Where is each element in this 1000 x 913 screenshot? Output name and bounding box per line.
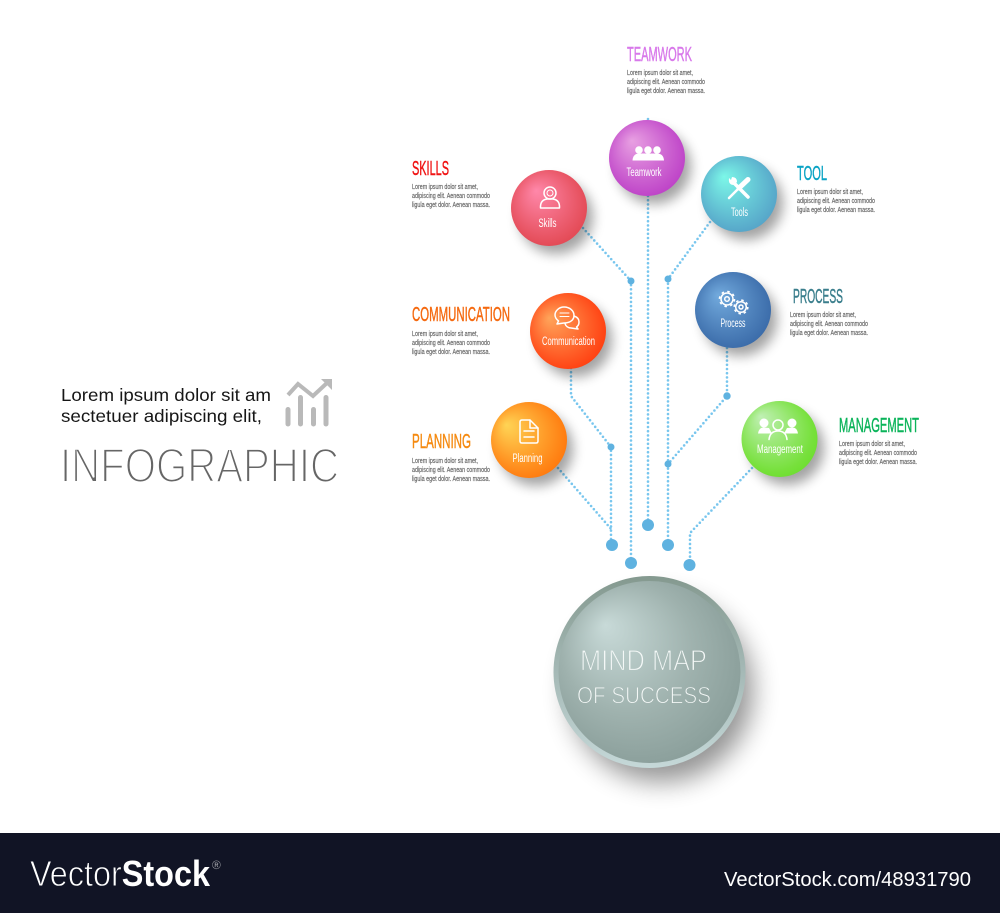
node: process bbox=[695, 272, 777, 356]
icon: people bbox=[758, 418, 798, 440]
body text: tool bbox=[797, 187, 875, 214]
body text: teamwork: adipiscing elit. Aenean commodo bbox=[627, 77, 705, 86]
icon: gears bbox=[720, 292, 748, 314]
node: management: Management bbox=[757, 444, 804, 456]
body text: management: adipiscing elit. Aenean commodo bbox=[839, 448, 917, 457]
panel: process bbox=[695, 272, 868, 356]
central circle: mind map of success bbox=[554, 576, 753, 782]
node: teamwork: Teamwork bbox=[626, 167, 662, 179]
panel: teamwork bbox=[609, 44, 705, 204]
node: management bbox=[742, 401, 824, 485]
heading: communication: COMMUNICATION bbox=[412, 304, 510, 326]
body text: teamwork bbox=[627, 68, 705, 95]
node: tool: Tools bbox=[731, 207, 748, 219]
connector lines bbox=[558, 119, 752, 571]
body text: communication: Lorem ipsum dolor sit amet, bbox=[412, 329, 478, 338]
body text: tool: adipiscing elit. Aenean commodo bbox=[797, 196, 875, 205]
footer logo: VectorStock bbox=[30, 853, 211, 894]
body text: skills: Lorem ipsum dolor sit amet, bbox=[412, 182, 478, 191]
body text: tool: Lorem ipsum dolor sit amet, bbox=[797, 187, 863, 196]
panel: tool bbox=[701, 156, 875, 240]
body text: management bbox=[839, 439, 917, 466]
body text: communication: ligula eget dolor. Aenean massa. bbox=[412, 347, 490, 356]
body text: planning: Lorem ipsum dolor sit amet, bbox=[412, 456, 478, 465]
body text: skills: adipiscing elit. Aenean commodo bbox=[412, 191, 490, 200]
body text: process: ligula eget dolor. Aenean massa. bbox=[790, 328, 868, 337]
central title bbox=[577, 644, 711, 710]
body text: planning bbox=[412, 456, 490, 483]
body text: teamwork: Lorem ipsum dolor sit amet, bbox=[627, 68, 693, 77]
node: communication bbox=[530, 293, 612, 377]
node: teamwork bbox=[609, 120, 691, 204]
icon: person bbox=[540, 187, 560, 208]
body text: communication: adipiscing elit. Aenean commodo bbox=[412, 338, 490, 347]
body text: process bbox=[790, 310, 868, 337]
icon: wrench and screwdriver bbox=[729, 177, 748, 198]
heading: teamwork: TEAMWORK bbox=[627, 44, 692, 66]
footer id: VectorStock.com/48931790 bbox=[724, 869, 971, 891]
heading: skills: SKILLS bbox=[412, 158, 449, 180]
icon: team bbox=[632, 146, 664, 160]
body text: planning: ligula eget dolor. Aenean massa. bbox=[412, 474, 490, 483]
body text: tool: ligula eget dolor. Aenean massa. bbox=[797, 205, 875, 214]
body text: skills bbox=[412, 182, 490, 209]
body text: process: Lorem ipsum dolor sit amet, bbox=[790, 310, 856, 319]
central title: OF SUCCESS bbox=[577, 682, 711, 710]
node: process: Process bbox=[720, 318, 746, 330]
body text: planning: adipiscing elit. Aenean commodo bbox=[412, 465, 490, 474]
node: communication: Communication bbox=[542, 336, 595, 348]
node: skills bbox=[511, 170, 593, 254]
body text: process: adipiscing elit. Aenean commodo bbox=[790, 319, 868, 328]
body text: skills: ligula eget dolor. Aenean massa. bbox=[412, 200, 490, 209]
heading: process: PROCESS bbox=[793, 286, 843, 308]
icon: growth chart bbox=[286, 379, 332, 426]
registered mark: ® bbox=[212, 858, 221, 872]
intro text: sectetuer adipiscing elit, bbox=[61, 406, 262, 426]
panel: communication bbox=[412, 293, 612, 377]
node: planning bbox=[491, 402, 573, 486]
left heading block bbox=[60, 379, 339, 493]
heading: planning: PLANNING bbox=[412, 431, 471, 453]
body text: communication bbox=[412, 329, 490, 356]
panel: skills bbox=[412, 158, 593, 254]
node: planning: Planning bbox=[512, 453, 542, 465]
heading: tool: TOOL bbox=[797, 163, 827, 185]
intro text: Lorem ipsum dolor sit am bbox=[61, 385, 271, 405]
infographic title: INFOGRAPHIC bbox=[60, 440, 339, 493]
panel: planning bbox=[412, 402, 573, 486]
icon: document bbox=[520, 420, 538, 443]
body text: management: Lorem ipsum dolor sit amet, bbox=[839, 439, 905, 448]
heading: management: MANAGEMENT bbox=[839, 415, 919, 437]
central title: MIND MAP bbox=[580, 644, 707, 678]
node: tool bbox=[701, 156, 783, 240]
body text: teamwork: ligula eget dolor. Aenean massa. bbox=[627, 86, 705, 95]
node: skills: Skills bbox=[538, 218, 557, 230]
icon: speech bubbles bbox=[555, 307, 579, 329]
intro text bbox=[61, 385, 271, 426]
footer bar bbox=[0, 833, 1000, 913]
panel: management bbox=[742, 401, 919, 485]
body text: management: ligula eget dolor. Aenean massa. bbox=[839, 457, 917, 466]
